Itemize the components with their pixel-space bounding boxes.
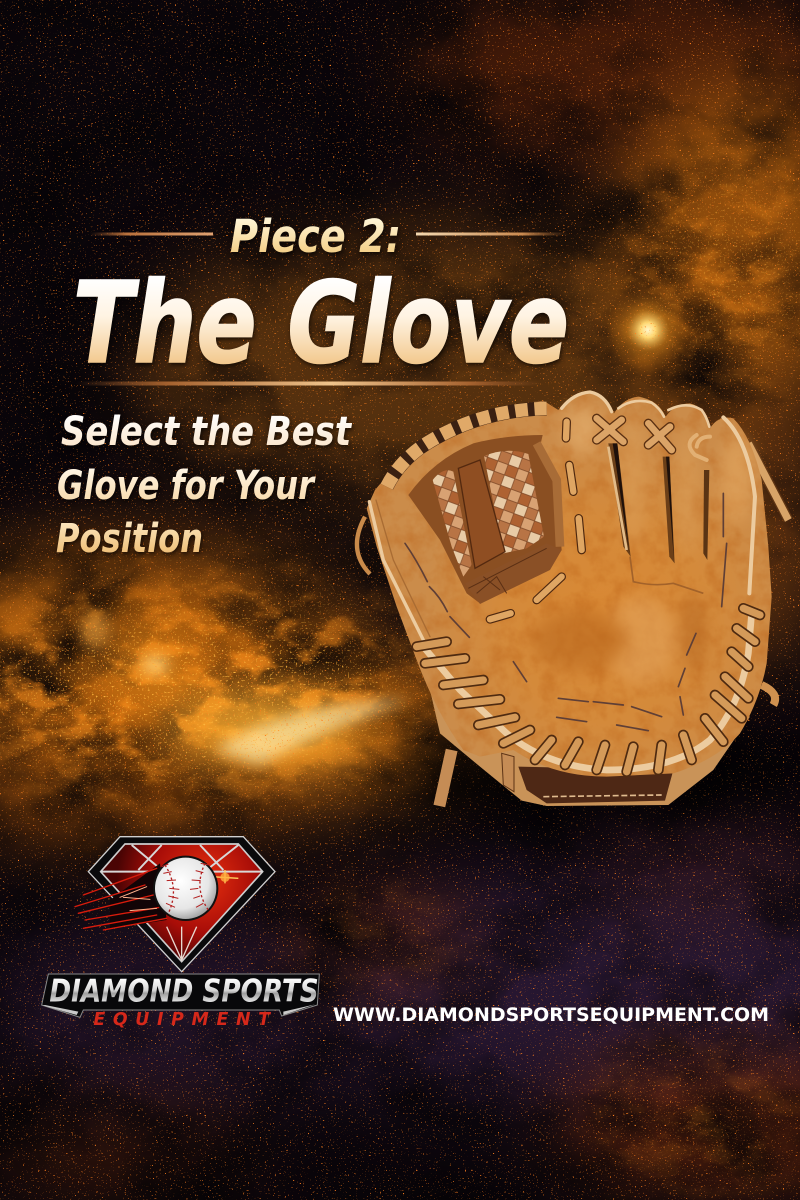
logo subtitle: EQUIPMENT (93, 1010, 271, 1030)
back of glove (430, 690, 750, 806)
subheading text block (56, 409, 353, 562)
heading: Piece 2: Piece 2: (230, 210, 401, 263)
glove straps (357, 443, 788, 806)
pale binding edges (369, 392, 755, 770)
left rule beside Piece 2 (90, 232, 213, 236)
web centre strap (458, 460, 505, 568)
logo speed streaks (75, 863, 167, 930)
finger gaps (608, 443, 709, 593)
baseball glove illustration (357, 391, 788, 806)
wrist strap (502, 753, 514, 792)
palm slots and stitching (405, 422, 727, 731)
lattice window left (433, 470, 472, 577)
bright star (606, 288, 690, 372)
top lacing (387, 408, 547, 487)
subheading line 2: Glove for Your (57, 463, 316, 509)
lattice window right (484, 451, 544, 553)
glove shadow (400, 727, 780, 823)
logo diamond (88, 837, 275, 972)
right rule beside Piece 2 (416, 232, 568, 236)
subheading line 3: Position (56, 516, 203, 562)
logo baseball (153, 856, 218, 921)
glove body (367, 391, 772, 777)
heading: The Glove: The Glove (73, 259, 569, 389)
subheading line 1: Select the Best (61, 409, 353, 455)
web pocket (408, 435, 562, 603)
logo banner (42, 974, 319, 1030)
heel laces (417, 608, 760, 772)
logo: Diamond Sports Equipment (42, 837, 319, 1030)
rule under title (76, 382, 540, 386)
logo wordmark: DIAMOND SPORTS (49, 974, 319, 1010)
leather texture (367, 391, 772, 777)
glove shading (533, 407, 753, 683)
web lower strap (465, 543, 562, 604)
title group (73, 210, 569, 389)
finger ties (597, 418, 710, 460)
website address: WWW.DIAMONDSPORTSEQUIPMENT.COM (333, 1004, 769, 1026)
